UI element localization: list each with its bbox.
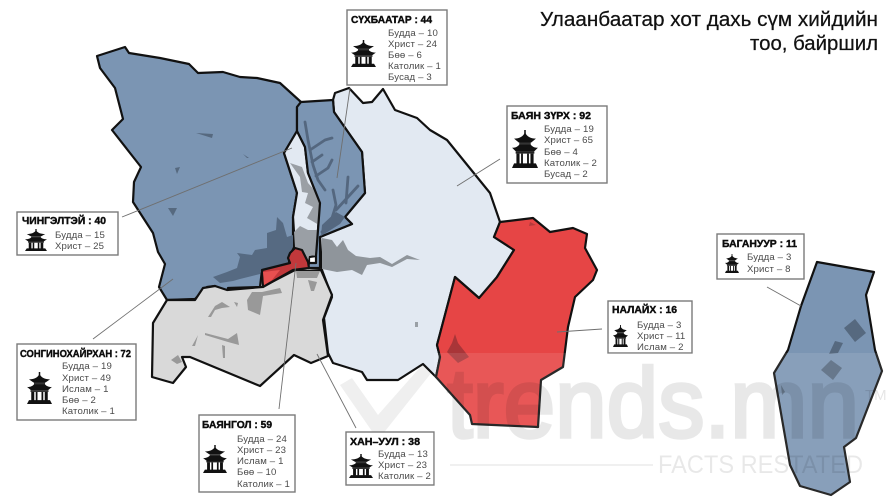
title: тоо, байршил <box>750 33 878 55</box>
callout: Bayanzurkh: Бусад – 2 <box>544 169 588 180</box>
callout: Songinokhairkhan <box>17 344 136 420</box>
callout: Sukhbaatar: Католик – 1 <box>388 61 441 72</box>
callout: Chingeltei: Христ – 25 <box>55 241 104 252</box>
watermark: trends.mn facts restated: FACTS RESTATED <box>658 451 863 479</box>
callout: Baganuur: БАГАНУУР : 11 <box>722 239 797 250</box>
callout: Songinokhairkhan: Католик – 1 <box>62 406 115 417</box>
callout: Bayanzurkh: Бөө – 4 <box>544 147 579 158</box>
district: Chingeltei and Songinokhairkhan <box>97 47 301 300</box>
callout: Chingeltei: ЧИНГЭЛТЭЙ : 40 <box>22 214 106 227</box>
callout: Chingeltei: Будда – 15 <box>55 230 105 241</box>
callout: Songinokhairkhan: Ислам – 1 <box>62 384 109 395</box>
title: Улаанбаатар хот дахь сүм хийдийн <box>540 9 878 31</box>
watermark logo: check mark <box>340 364 432 440</box>
callout: Baganuur: Христ – 8 <box>747 264 791 275</box>
callout: Bayangol: БАЯНГОЛ : 59 <box>202 420 272 431</box>
district: Bayanzurkh <box>284 88 514 380</box>
callout: Khan-Uul: ХАН–УУЛ : 38 <box>350 437 420 448</box>
callout: Nalaikh: Будда – 3 <box>637 320 681 331</box>
callout: Bayanzurkh: Будда – 19 <box>544 124 594 135</box>
icon: pagoda <box>725 254 739 273</box>
district: Khan-Uul <box>152 270 332 386</box>
district: Baganuur <box>774 262 882 495</box>
callout: Bayanzurkh: Христ – 65 <box>544 135 593 146</box>
district: Bayangol <box>262 248 309 287</box>
callout: Songinokhairkhan: Христ – 49 <box>62 373 111 384</box>
callout: Sukhbaatar <box>347 10 447 85</box>
icon: pagoda <box>25 229 47 251</box>
callout: Khan-Uul: Будда – 13 <box>378 449 428 460</box>
icon: pagoda <box>512 130 538 168</box>
callout: Bayanzurkh: БАЯН ЗҮРХ : 92 <box>511 111 591 122</box>
callout lines <box>93 88 801 428</box>
callout: Bayangol: Католик – 1 <box>237 479 290 490</box>
callout: Sukhbaatar: Бусад – 3 <box>388 72 432 83</box>
callout: Bayanzurkh: Католик – 2 <box>544 158 597 169</box>
icon: pagoda <box>203 445 227 473</box>
callout: Nalaikh <box>608 301 692 353</box>
callout: Bayangol: Бөө – 10 <box>237 467 277 478</box>
callout: Chingeltei <box>17 212 118 255</box>
watermark: trends.mn facts restated: TM <box>865 387 887 404</box>
watermark: trends.mn facts restated <box>434 348 892 500</box>
callout: Songinokhairkhan: Будда – 19 <box>62 361 112 372</box>
icon: pagoda <box>349 454 373 478</box>
callout: Songinokhairkhan: Бөө – 2 <box>62 395 96 406</box>
district: Nalaikh <box>436 218 597 427</box>
callout: Khan-Uul: Католик – 2 <box>378 471 431 482</box>
callout: Bayanzurkh <box>507 106 607 183</box>
callout: Sukhbaatar: Будда – 10 <box>388 28 438 39</box>
callout: Sukhbaatar: СҮХБААТАР : 44 <box>351 15 432 26</box>
callout: Baganuur <box>717 234 804 279</box>
callout: Bayangol: Ислам – 1 <box>237 456 284 467</box>
callout: Sukhbaatar: Бөө – 6 <box>388 50 422 61</box>
callout: Khan-Uul <box>346 432 434 485</box>
district: Sukhbaatar <box>297 100 365 268</box>
icon: pagoda <box>27 372 52 404</box>
title <box>540 9 878 55</box>
watermark: trends.mn facts restated: trends.mn <box>447 348 859 458</box>
callout: Baganuur: Будда – 3 <box>747 252 791 263</box>
callout: Bayangol <box>199 415 295 492</box>
icon: pagoda <box>613 325 628 347</box>
callout: Khan-Uul: Христ – 23 <box>378 460 427 471</box>
icon: pagoda <box>351 40 376 67</box>
map: Ulaanbaatar districts <box>97 47 882 495</box>
callout: Nalaikh: Ислам – 2 <box>637 342 684 353</box>
callout: Nalaikh: НАЛАЙХ : 16 <box>612 303 677 316</box>
callout: Songinokhairkhan: СОНГИНОХАЙРХАН : 72 <box>20 347 131 360</box>
callout: Sukhbaatar: Христ – 24 <box>388 39 438 50</box>
callout: Bayangol: Христ – 23 <box>237 445 286 456</box>
callout: Bayangol: Будда – 24 <box>237 434 287 445</box>
callout: Nalaikh: Христ – 11 <box>637 331 685 342</box>
